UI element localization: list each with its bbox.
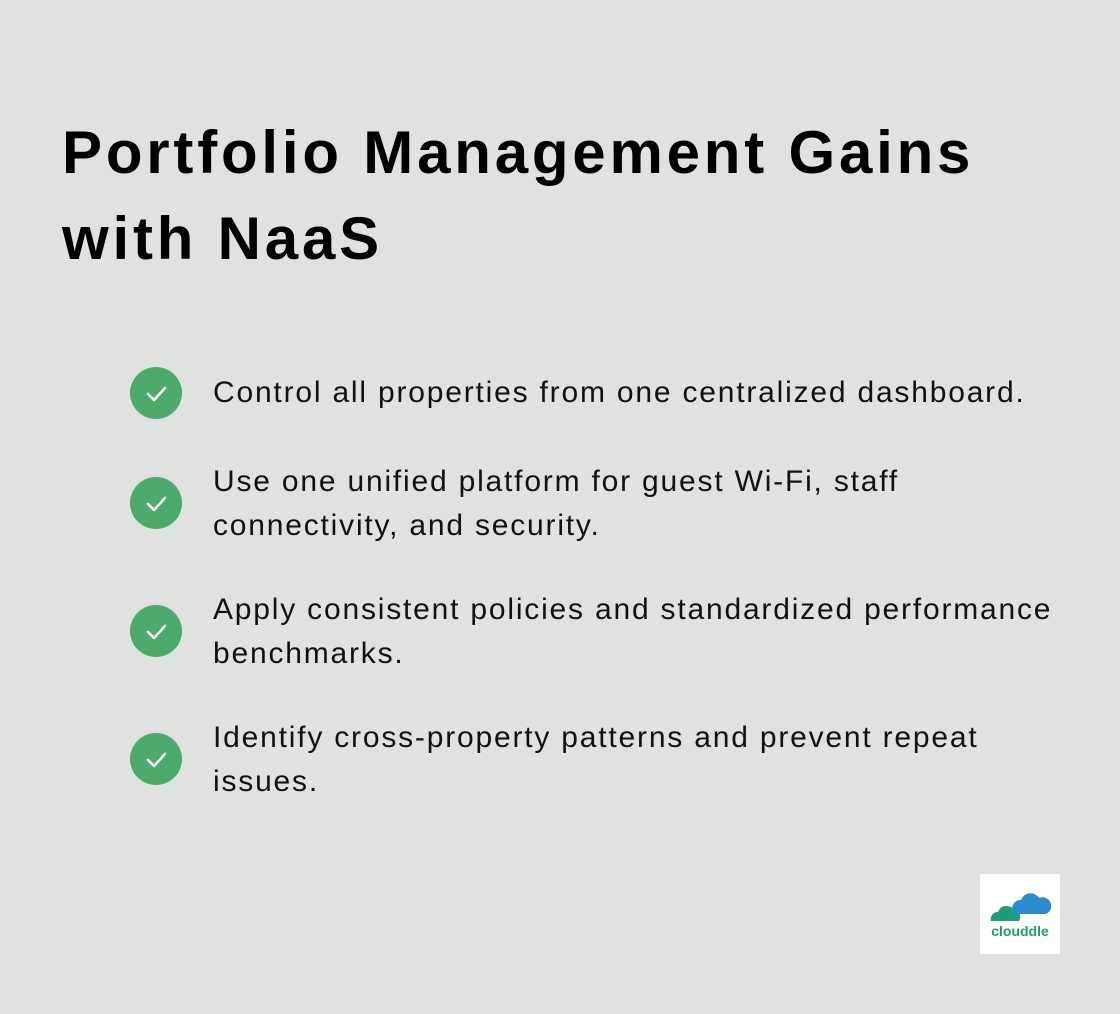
text: Apply consistent policies and standardized performance — [213, 593, 1052, 626]
text — [213, 721, 978, 798]
text — [213, 593, 1052, 670]
icon: check — [130, 367, 182, 419]
text: Use one unified platform for guest Wi-Fi, staff — [213, 465, 899, 498]
logo: clouddle — [980, 874, 1060, 954]
icon: check — [130, 605, 182, 657]
item 2 — [130, 465, 899, 542]
title: with NaaS — [62, 205, 383, 272]
text: benchmarks. — [213, 637, 405, 670]
text: issues. — [213, 765, 319, 798]
item 4 — [130, 721, 978, 798]
item 1 — [130, 367, 1026, 419]
text — [213, 465, 899, 542]
text: connectivity, and security. — [213, 509, 601, 542]
item 3 — [130, 593, 1052, 670]
title — [62, 119, 974, 272]
icon: check — [130, 477, 182, 529]
icon: check — [130, 733, 182, 785]
title: Portfolio Management Gains — [62, 119, 974, 186]
logo: clouddle: clouddle — [991, 923, 1049, 939]
text: Identify cross-property patterns and prevent repeat — [213, 721, 978, 754]
text: Control all properties from one centralized dashboard. — [213, 376, 1026, 409]
